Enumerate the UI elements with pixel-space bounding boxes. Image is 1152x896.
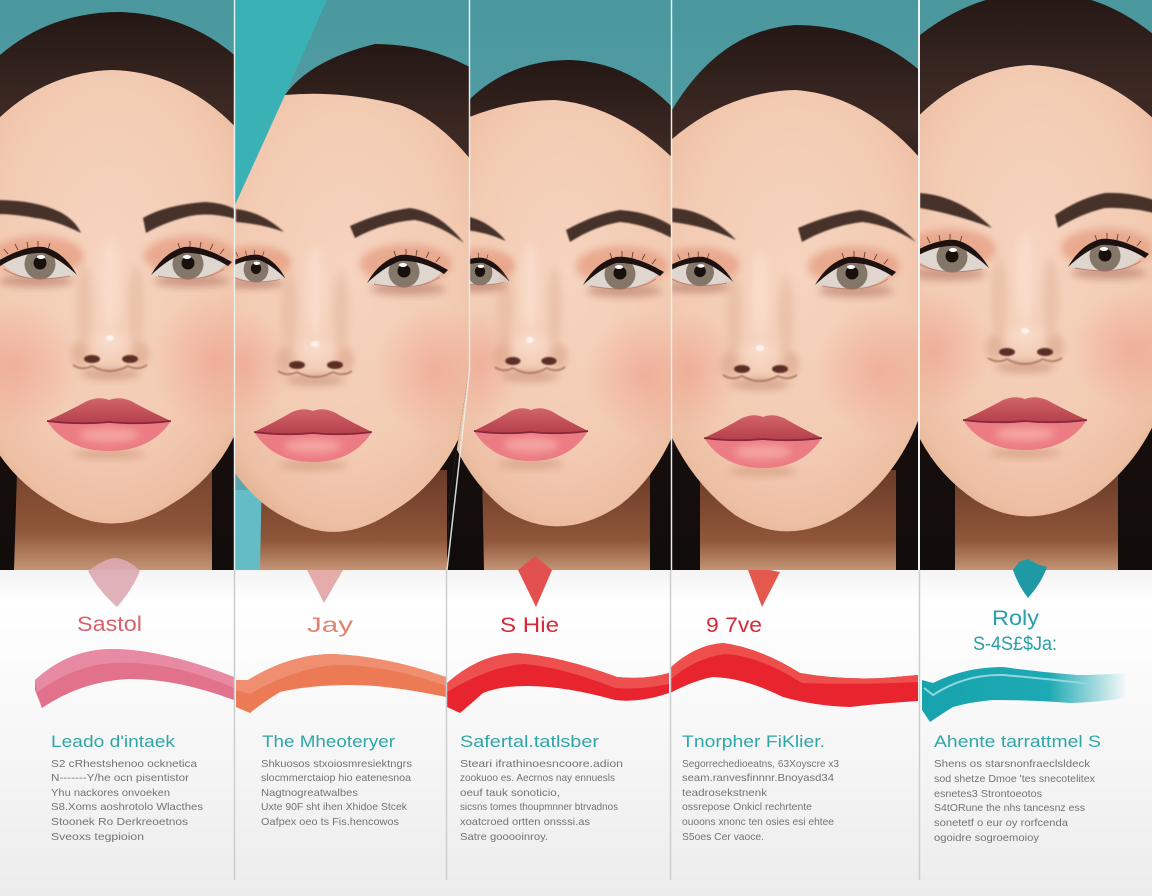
body 4: teadrosekstnenk [682, 787, 768, 799]
pin 5 [1013, 559, 1047, 598]
ribbon 3 [447, 653, 669, 713]
body 4: ossrepose Onkicl rechrtente [682, 801, 812, 813]
body 5: Shens os starsnonfraeclsldeck [934, 758, 1091, 770]
text block 4 [682, 732, 839, 843]
body 1: S8.Xoms aoshrotolo Wlacthes [51, 801, 203, 813]
hair [0, 12, 240, 570]
ribbon 4 [670, 643, 918, 707]
heading 4: Tnorpher FiKlier. [682, 732, 825, 751]
hair [672, 25, 925, 570]
eyes [657, 246, 900, 297]
hair [920, 0, 1152, 570]
body 3: Steari ifrathinoesncoore.adion [460, 758, 623, 770]
body 1: N-------Y/he ocn pisentistor [51, 772, 190, 784]
pin 3 [518, 556, 552, 607]
body 3: Satre gooooinroy. [460, 831, 548, 843]
body 5: sod shetze Dmoe 'tes snecotelitex [934, 773, 1096, 785]
body 4: seam.ranvesfinnnr.Bnoyasd34 [682, 772, 834, 784]
heading 1: Leado d'intaek [51, 732, 176, 751]
body 4 [682, 758, 839, 843]
body 1: Stoonek Ro Derkreoetnos [51, 816, 188, 828]
neck [14, 470, 212, 570]
body 1 [51, 758, 203, 843]
lips [254, 409, 372, 470]
lips [963, 397, 1087, 458]
label 1: Sastol [77, 613, 142, 636]
eyes [442, 246, 668, 297]
panel: lower information strip [0, 570, 1152, 896]
label 4: 9 7ve [706, 614, 762, 637]
nose [276, 246, 354, 386]
nose [986, 233, 1064, 373]
heading 5: Ahente tarrattmel S [934, 732, 1101, 751]
body 1: Sveoxs tegpioion [51, 831, 144, 843]
body 2: Nagtnogreatwalbes [261, 787, 358, 799]
body 2: Oafpex oeo ts Fis.hencowos [261, 816, 399, 828]
lips [704, 415, 822, 476]
label 5: Roly [992, 607, 1040, 630]
panel: portrait 2 [235, 0, 469, 570]
body 5 [934, 758, 1096, 844]
cheeks [880, 290, 1152, 410]
eyes [218, 244, 452, 295]
text block 1 [51, 732, 203, 843]
face [0, 70, 250, 524]
body 2: Uxte 90F sht ihen Xhidoe Stcek [261, 801, 408, 813]
nose [721, 250, 799, 390]
body 4: ouoons xnonc ten osies esi ehtee [682, 816, 834, 828]
pin 4 [748, 570, 780, 607]
eyes [0, 236, 236, 287]
body 1: S2 cRhestshenoo ocknetica [51, 758, 197, 770]
body 1: Yhu nackores onvoeken [51, 787, 170, 799]
text block 2 [261, 732, 412, 828]
body 3: zookuoo es. Aecrnos nay ennuesls [460, 772, 615, 784]
face [456, 100, 671, 526]
eyebrows [465, 210, 672, 242]
body 4: Segorrechedioeatns, 63Xoyscre x3 [682, 758, 839, 770]
body 2: slocmmerctaiop hio eatenesnoa [261, 772, 411, 784]
pin 2 [307, 570, 343, 603]
body 2 [261, 758, 412, 828]
text block 5 [934, 732, 1101, 844]
nose [493, 242, 567, 382]
label 3: S Hie [500, 614, 559, 637]
eyebrows [920, 193, 1152, 228]
cheeks [672, 324, 918, 414]
body 3: oeuf tauk sonoticio, [460, 787, 560, 799]
panel: portrait 5 [920, 0, 1152, 570]
cheeks [466, 326, 670, 420]
neck [700, 470, 896, 570]
body 4: S5oes Cer vaoce. [682, 831, 764, 843]
panel: portrait 3 [447, 0, 671, 570]
eyebrows [0, 200, 236, 233]
panel: portrait 1 [0, 0, 234, 570]
lips [474, 408, 588, 469]
label 2: Jay [307, 614, 354, 637]
background facet [235, 0, 327, 205]
heading 3: Safertal.tatlsber [460, 732, 599, 751]
cheeks [235, 324, 468, 414]
lower teal patch [235, 490, 261, 570]
panel: portrait 4 [672, 0, 918, 570]
body 3: sicsns tomes thoupmnner btrvadnos [460, 801, 618, 813]
ribbon 2 [236, 654, 446, 713]
ribbon 5 [922, 667, 1127, 722]
face [900, 65, 1152, 516]
text block 3 [460, 732, 623, 843]
neck [955, 470, 1118, 570]
face [235, 94, 469, 532]
eyebrows [672, 208, 916, 242]
nose [71, 240, 149, 380]
eyes [904, 228, 1152, 280]
body 3 [460, 758, 623, 843]
cheeks [0, 311, 234, 408]
label 5: S-4S£$Ja: [973, 634, 1057, 655]
neck [260, 470, 447, 570]
pin 1 [88, 558, 140, 607]
lips [47, 398, 171, 459]
hair [447, 60, 675, 570]
body 5: sonetetf o eur oy rorfcenda [934, 817, 1068, 829]
body 2: Shkuosos stxoiosmresiektngrs [261, 758, 412, 770]
eyebrows [236, 208, 464, 243]
body 5: esnetes3 Strontoeotos [934, 788, 1042, 800]
heading 2: The Mheoteryer [262, 732, 395, 751]
body 3: xoatcroed ortten onsssi.as [460, 816, 590, 828]
body 5: S4tORune the nhs tancesnz ess [934, 802, 1085, 814]
ribbon 1 [35, 649, 234, 708]
hair [285, 44, 475, 570]
face [672, 90, 918, 532]
neck [482, 470, 650, 570]
body 5: ogoidre sogroemoioy [934, 832, 1040, 844]
label 5 [973, 607, 1057, 655]
